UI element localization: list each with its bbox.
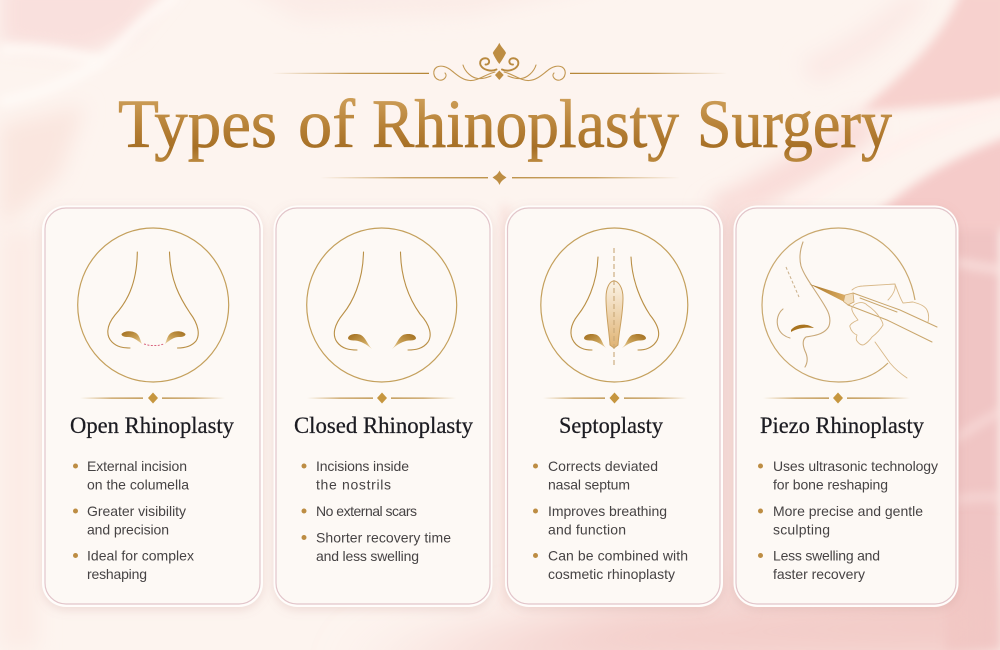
- bullet list: [302, 458, 451, 564]
- card background: [42, 206, 263, 607]
- title: of: [298, 86, 355, 162]
- bullet list: [73, 458, 194, 582]
- divider: [763, 392, 910, 404]
- divider: [307, 392, 456, 404]
- bullet list: [758, 458, 938, 582]
- bullet list: the nostrils: [316, 476, 391, 492]
- bullet list: Improves breathing: [548, 503, 667, 519]
- title: Types: [118, 86, 277, 162]
- bullet list: Can be combined with: [548, 548, 688, 564]
- bullet list: [533, 458, 688, 582]
- bullet list: Shorter recovery time: [316, 530, 451, 546]
- heading: Open Rhinoplasty: [70, 413, 234, 438]
- bullet list: Less swelling and: [773, 548, 880, 564]
- bottom ornament under title: [320, 170, 680, 185]
- title: Surgery: [697, 86, 892, 162]
- card background: [734, 206, 958, 607]
- bullet list: cosmetic rhinoplasty: [548, 566, 675, 582]
- title: [118, 86, 892, 162]
- bullet list: nasal septum: [548, 476, 630, 492]
- divider: [543, 392, 687, 404]
- bullet list: sculpting: [773, 522, 830, 538]
- bullet list: for bone reshaping: [773, 476, 888, 492]
- bullet list: Greater visibility: [87, 503, 186, 519]
- bullet list: and function: [548, 522, 626, 538]
- bullet list: on the columella: [87, 476, 189, 492]
- icon: nose with open incision: [78, 228, 229, 382]
- bullet list: reshaping: [87, 566, 147, 582]
- card background: [505, 206, 723, 607]
- bullet list: and precision: [87, 522, 169, 538]
- icon: side profile nose with ultrasonic tool and hand: [762, 228, 937, 382]
- title: Rhinoplasty: [372, 86, 679, 162]
- panel: open rhinoplasty: [42, 206, 263, 607]
- bullet list: Uses ultrasonic technology: [773, 458, 938, 474]
- panel: piezo rhinoplasty: [734, 206, 958, 607]
- icon: nose with septum: [541, 228, 688, 382]
- heading: Septoplasty: [559, 413, 663, 438]
- bullet list: faster recovery: [773, 566, 865, 582]
- bullet list: No external scars: [316, 503, 417, 519]
- bullet list: Incisions inside: [316, 458, 409, 474]
- heading: Piezo Rhinoplasty: [760, 413, 924, 438]
- card background: [274, 206, 492, 607]
- bullet list: Corrects deviated: [548, 458, 658, 474]
- icon: nose with internal incisions: [307, 228, 457, 382]
- divider: [80, 392, 225, 404]
- bullet list: More precise and gentle: [773, 503, 923, 519]
- panel: closed rhinoplasty: [274, 206, 492, 607]
- bullet list: and less swelling: [316, 548, 419, 564]
- heading: Closed Rhinoplasty: [294, 413, 473, 438]
- bullet list: Ideal for complex: [87, 548, 194, 564]
- panel: septoplasty: [505, 206, 723, 607]
- bullet list: External incision: [87, 458, 187, 474]
- top ornament: [272, 43, 727, 81]
